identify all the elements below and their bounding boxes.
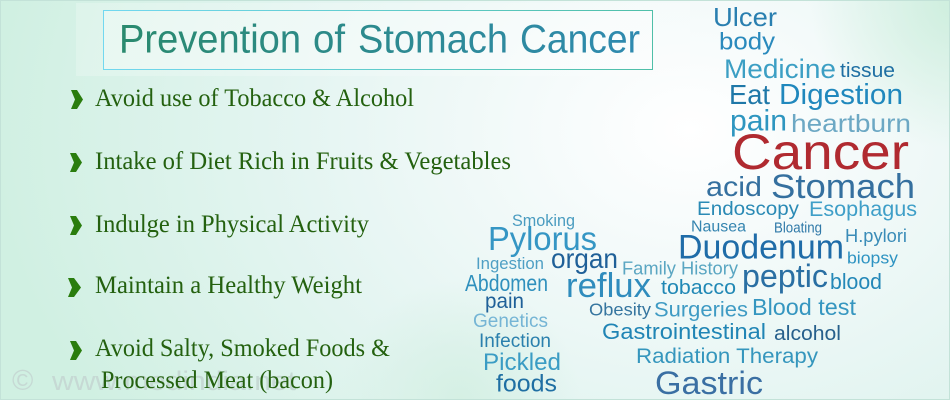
word cloud: heartburn (791, 110, 911, 138)
word cloud: H.pylori (845, 226, 907, 246)
word cloud: foods (496, 370, 557, 398)
word cloud: Obesity (589, 300, 651, 320)
word cloud: Abdomen (465, 270, 548, 296)
word cloud: Genetics (473, 311, 548, 332)
word cloud: Digestion (779, 79, 903, 111)
word cloud: Blood test (752, 294, 857, 320)
word cloud (465, 2, 917, 400)
word cloud: Endoscopy (697, 199, 800, 220)
word cloud: Radiation Therapy (636, 345, 819, 368)
bullet item: salty and smoked foods: Avoid Salty, Smoked Foods & (95, 335, 390, 362)
word cloud: biopsy (847, 250, 899, 268)
word cloud: alcohol (774, 323, 841, 345)
word cloud: pain (485, 290, 524, 313)
bullet item: tobacco and alcohol: Avoid use of Tobacco & Alcohol (95, 85, 414, 112)
bullet item: healthy weight: Maintain a Healthy Weight (95, 272, 362, 299)
title box: Cancer (520, 18, 640, 62)
word cloud: tissue (840, 60, 895, 82)
word cloud: body (719, 28, 775, 56)
word cloud: Pylorus (488, 220, 597, 257)
watermark: © (12, 365, 33, 397)
word cloud: Medicine (724, 54, 836, 84)
word cloud: Surgeries (654, 298, 748, 322)
title box: of (313, 18, 346, 62)
word cloud: Esophagus (809, 198, 917, 221)
word cloud: Duodenum (678, 228, 844, 266)
word cloud: Gastrointestinal (602, 319, 766, 344)
word cloud: tobacco (661, 277, 736, 299)
bullet item: fruits and vegetables: Intake of Diet Rich in Fruits & Vegetables (95, 148, 511, 175)
title box: Stomach (358, 18, 508, 62)
word cloud: Smoking (512, 211, 575, 230)
word cloud: organ (551, 243, 618, 274)
bullet item: salty and smoked foods: Processed Meat (bacon) (101, 367, 333, 394)
watermark: www.medindia.net (51, 366, 297, 396)
word cloud: Infection (479, 331, 551, 352)
prevention list (68, 85, 511, 394)
word cloud: Ingestion (476, 255, 544, 273)
word cloud: peptic (742, 258, 828, 294)
bullet item: physical activity: Indulge in Physical Activity (95, 211, 369, 238)
title box (104, 10, 652, 70)
word cloud: Stomach (771, 168, 915, 206)
word cloud: blood (830, 269, 882, 294)
word cloud: Cancer (732, 124, 909, 180)
bullet item: salty and smoked foods (70, 335, 390, 394)
word cloud: acid (706, 171, 762, 202)
word cloud: Eat (729, 79, 770, 110)
word cloud: Pickled (483, 349, 561, 376)
title box: Prevention (119, 18, 301, 62)
word cloud: Gastric (655, 365, 763, 400)
word cloud: reflux (566, 267, 651, 305)
word cloud: pain (730, 104, 787, 138)
word cloud: Bloating (774, 220, 822, 236)
word cloud: Ulcer (713, 2, 777, 32)
word cloud: Nausea (691, 218, 746, 236)
word cloud: Family History (622, 258, 738, 278)
